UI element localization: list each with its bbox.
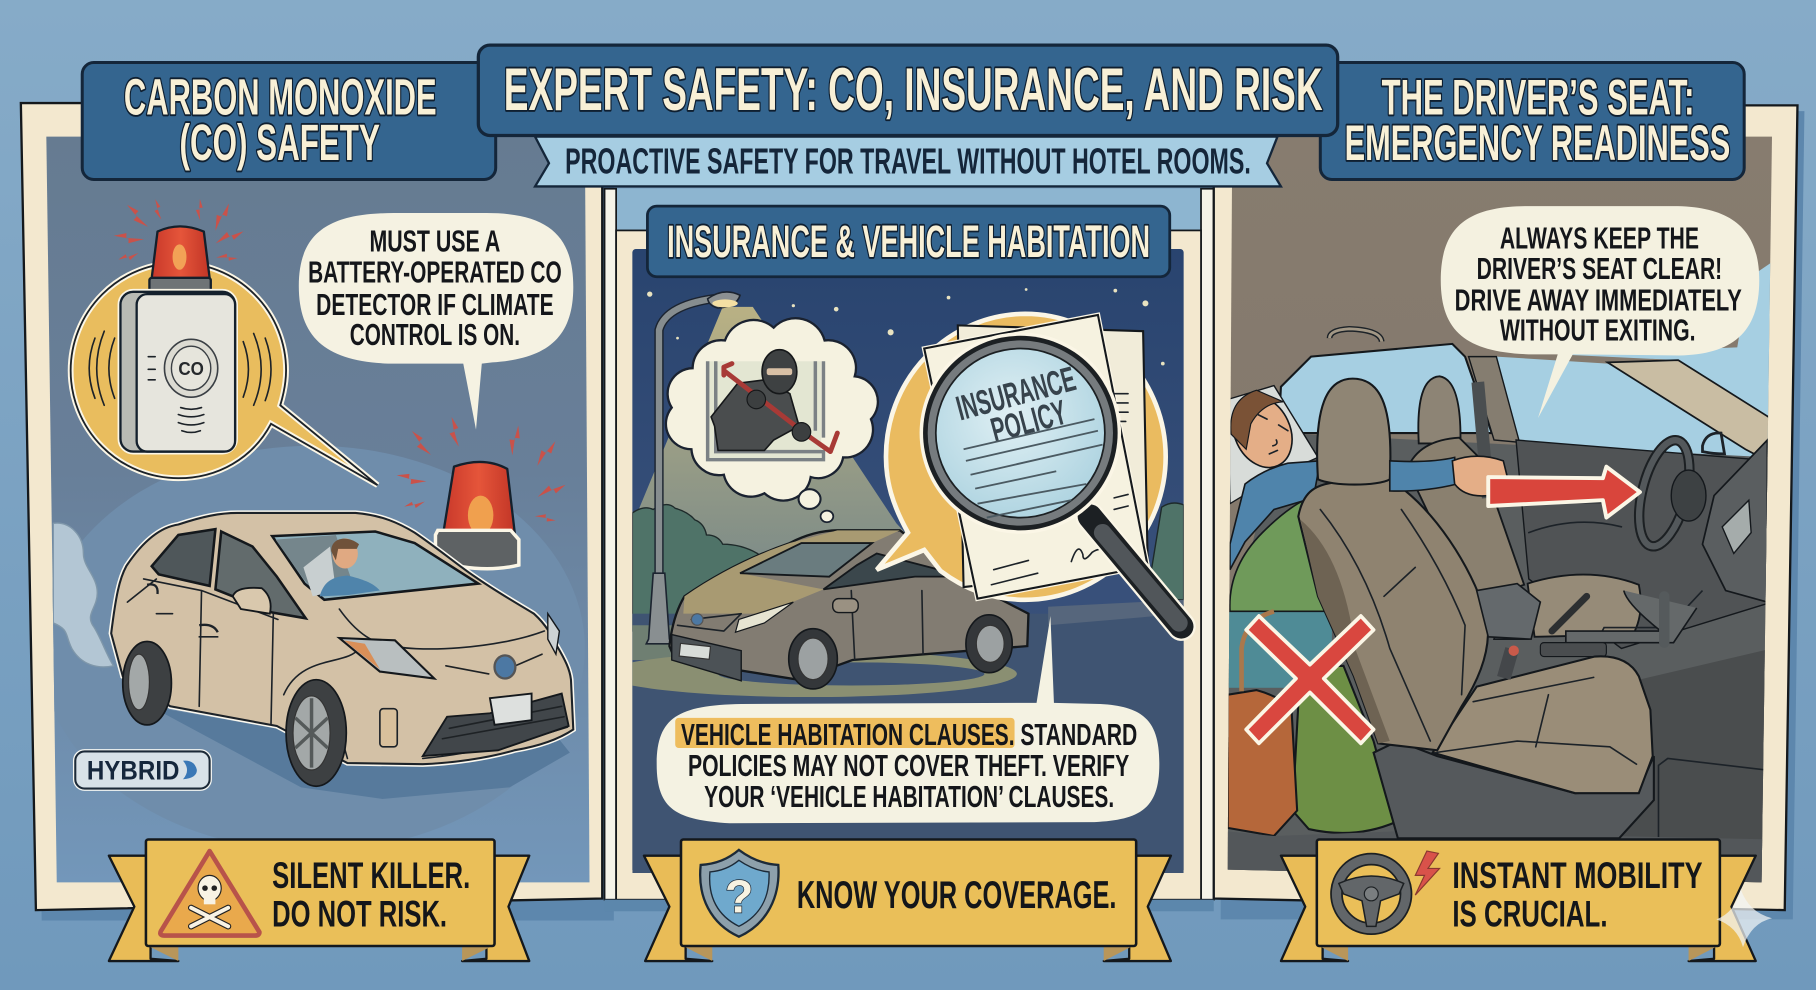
stars — [647, 288, 1165, 365]
lens text — [952, 360, 1088, 457]
lens text: POLICY — [987, 394, 1071, 450]
banner: silent killer: DO NOT RISK. — [272, 892, 447, 934]
pillow — [1228, 386, 1318, 504]
callout: battery CO detector: DETECTOR IF CLIMATE — [316, 289, 554, 322]
headlight — [339, 638, 434, 679]
ground light — [632, 655, 1017, 697]
badge: hybrid — [75, 751, 210, 789]
callout: insurance policy review — [877, 314, 1181, 626]
callout: battery CO detector: CONTROL IS ON. — [350, 319, 520, 352]
icon: sparkle watermark — [1716, 889, 1772, 947]
front wheel — [286, 680, 346, 786]
front window and sky — [1496, 357, 1772, 463]
callout: vehicle habitation clauses: VEHICLE HABITATION CLAUSES. — [681, 717, 1015, 752]
illustration: gray hybrid car at night — [669, 530, 1028, 689]
side mirror — [233, 588, 271, 614]
heading: insurance and vehicle habitation: INSURANCE & VEHICLE HABITATION — [667, 216, 1150, 267]
rear seat — [1407, 376, 1641, 637]
fog light — [380, 709, 397, 747]
callout: keep driver's seat clear — [1441, 206, 1759, 418]
panel: carbon monoxide safety — [21, 103, 614, 921]
illustration: beige hybrid car — [111, 513, 573, 786]
icon: shield with question mark — [700, 850, 779, 937]
lens text: INSURANCE — [952, 360, 1080, 428]
panel: insurance and vehicle habitation — [605, 189, 1214, 911]
suitcase — [1228, 690, 1297, 836]
icon: warning rays around beacon — [395, 416, 567, 524]
icon: skull warning triangle — [160, 851, 259, 936]
subtitle ribbon: PROACTIVE SAFETY FOR TRAVEL WITHOUT HOTEL ROOMS. — [565, 142, 1251, 182]
icon: steering wheel — [1337, 859, 1406, 929]
heading: insurance and vehicle habitation — [647, 206, 1170, 277]
CO label: CO — [178, 358, 204, 379]
exhaust smoke — [53, 523, 114, 667]
teal bag — [1228, 611, 1332, 688]
callout: battery CO detector — [299, 213, 573, 430]
callout: battery CO detector: MUST USE A — [369, 225, 500, 258]
icon: red X over clutter — [1246, 616, 1374, 743]
icon: lightning bolt — [1415, 851, 1440, 895]
heading: driver's seat — [1320, 63, 1744, 179]
policy documents — [924, 315, 1148, 599]
icon: street lamp — [646, 292, 740, 644]
banner: know your coverage — [644, 839, 1171, 961]
rear side window — [1279, 344, 1492, 433]
A pillar — [1608, 360, 1772, 463]
icon: steering wheel and console — [1493, 432, 1768, 658]
street light cone — [639, 306, 905, 554]
backpack — [1293, 666, 1396, 833]
sleeping driver — [1230, 390, 1318, 570]
door and dash — [1228, 433, 1772, 892]
title: EXPERT SAFETY: CO, INSURANCE, AND RISK — [504, 55, 1323, 123]
heading: carbon monoxide safety — [82, 63, 496, 179]
floor — [1228, 832, 1762, 882]
reaching arm — [1390, 456, 1509, 496]
hedge — [632, 504, 759, 632]
banner: silent killer: SILENT KILLER. — [272, 854, 470, 896]
callout: vehicle habitation clauses — [657, 616, 1159, 823]
emblem — [495, 655, 515, 679]
icon: warning rays around detector — [113, 199, 245, 262]
icon: magnifying glass — [920, 332, 1181, 626]
badge: hybrid: HYBRID — [87, 755, 180, 785]
heading: carbon monoxide safety: (CO) SAFETY — [180, 114, 380, 171]
banner: silent killer — [109, 839, 529, 961]
callout: vehicle habitation clauses: STANDARD — [1020, 717, 1137, 752]
banner: know your coverage: KNOW YOUR COVERAGE. — [797, 873, 1116, 917]
icon: CO detector callout — [71, 226, 378, 485]
callout: vehicle habitation clauses: YOUR ‘VEHICLE HABITATION’ CLAUSES. — [704, 779, 1114, 814]
rear wheel — [123, 641, 171, 725]
callout: keep driver's seat clear: ALWAYS KEEP THE — [1500, 220, 1699, 255]
licence plate — [490, 694, 532, 725]
grab handle — [1330, 329, 1382, 342]
car shadow — [151, 706, 570, 799]
heading: carbon monoxide safety: CARBON MONOXIDE — [124, 69, 437, 126]
callout: battery CO detector: BATTERY-OPERATED CO — [308, 257, 562, 290]
green blanket — [1230, 500, 1327, 611]
banner: instant mobility — [1281, 839, 1756, 961]
callout: vehicle habitation clauses: POLICIES MAY NOT COVER THEFT. VERIFY — [688, 748, 1129, 783]
banner: instant mobility: IS CRUCIAL. — [1452, 892, 1608, 934]
grille and bumper — [423, 694, 569, 756]
thought bubble: burglar — [666, 318, 878, 522]
title — [478, 45, 1338, 135]
callout: keep driver's seat clear: WITHOUT EXITING. — [1500, 312, 1696, 347]
seat belt — [1478, 382, 1488, 498]
banner: instant mobility: INSTANT MOBILITY — [1452, 854, 1703, 896]
subtitle ribbon — [535, 137, 1281, 186]
arrow: slide to driver's seat — [1488, 467, 1640, 518]
road — [632, 614, 1184, 874]
panel: the driver's seat emergency readiness — [1214, 105, 1804, 919]
front seat — [1298, 379, 1654, 838]
icon: red warning beacon — [435, 462, 519, 569]
icon: shield with question mark: ? — [725, 870, 753, 922]
driver — [303, 538, 380, 596]
